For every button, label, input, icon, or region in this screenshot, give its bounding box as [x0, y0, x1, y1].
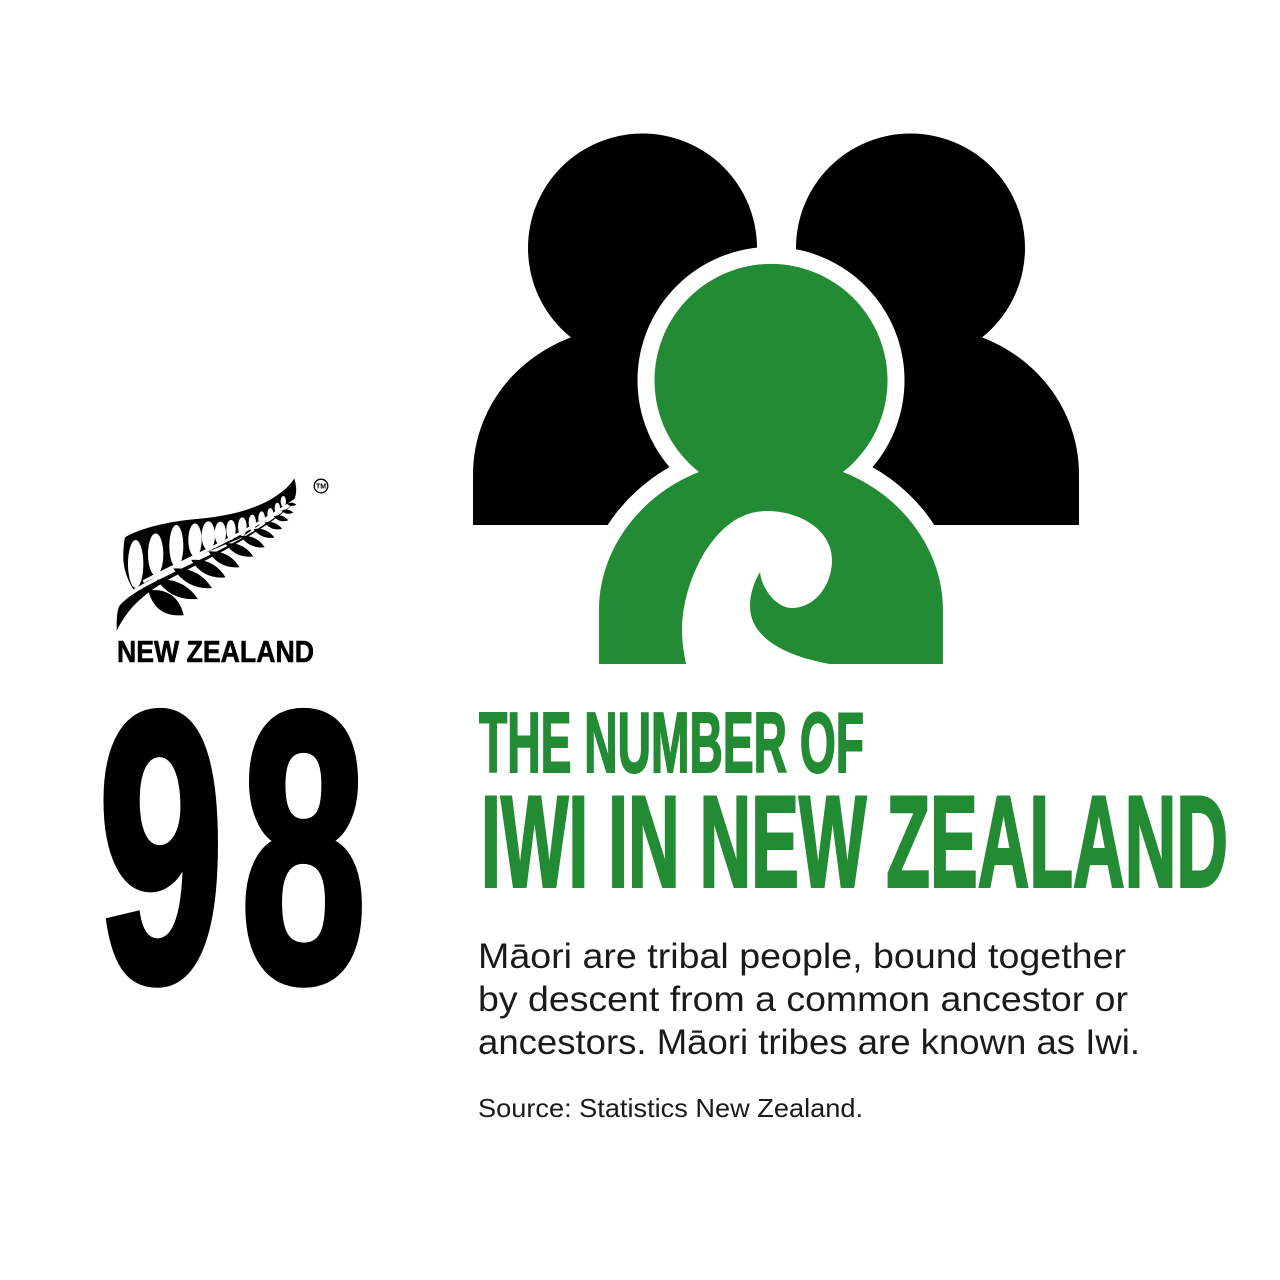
icon: silver fern [117, 478, 297, 631]
description text: ancestors. Māori tribes are known as Iwi. [478, 1023, 1140, 1062]
icon: trademark [314, 479, 328, 493]
white outline around green person [599, 264, 943, 664]
icon: left black person [473, 134, 757, 525]
description text: by descent from a common ancestor or [478, 980, 1128, 1019]
fern upper frond [123, 478, 296, 589]
icon: right black person [796, 134, 1079, 525]
icon: green person with koru [599, 264, 943, 664]
description text: Māori are tribal people, bound together [478, 937, 1126, 976]
icon: three people with koru [473, 134, 1079, 664]
big number: 98 [98, 633, 383, 1062]
icon: trademark: TM [316, 484, 326, 490]
logo wordmark: NEW ZEALAND [117, 634, 314, 669]
description text [478, 937, 1140, 1062]
logo: silver fern New Zealand [117, 478, 328, 669]
fern white midrib [143, 499, 297, 582]
source: Source: Statistics New Zealand. [478, 1093, 863, 1123]
heading line 1: THE NUMBER OF [479, 696, 864, 791]
fern frond lobes [128, 496, 286, 588]
fern lower leaflets [143, 502, 296, 623]
fern stem [117, 503, 295, 631]
